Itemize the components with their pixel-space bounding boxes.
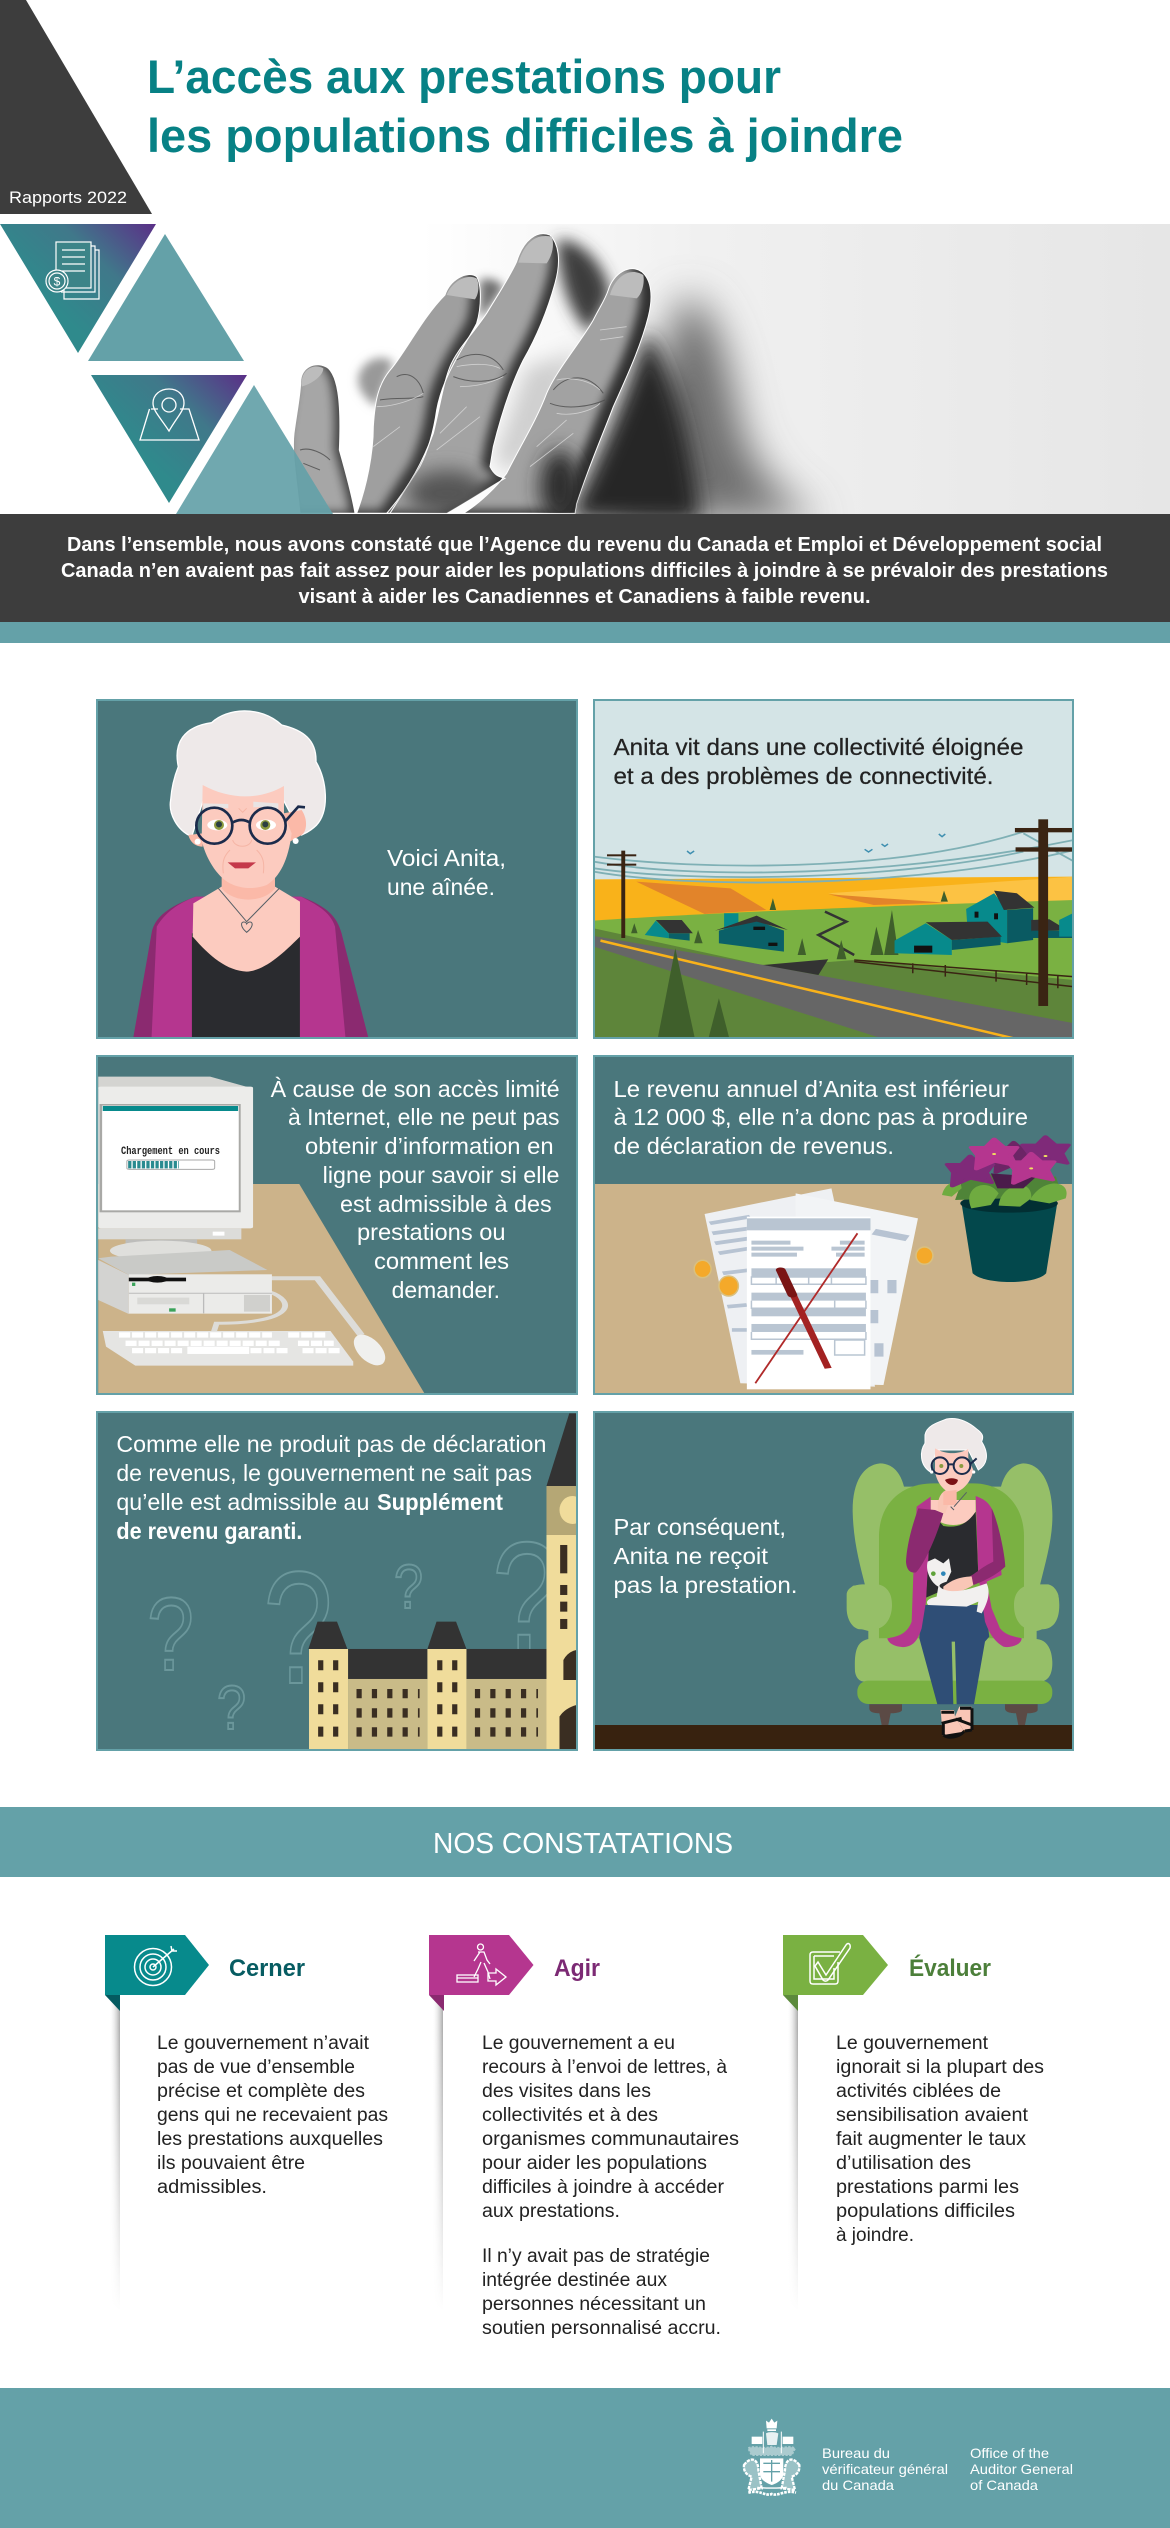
column: Agir [428, 1935, 739, 2339]
teal triangle 2 [176, 385, 333, 514]
text [271, 1076, 560, 1303]
text: et a des problèmes de connectivité. [614, 763, 994, 789]
title: L’accès aux prestations pour [147, 50, 781, 103]
text: personnes nécessitant un [482, 2294, 706, 2315]
illustration: forms, coins, pen and flower pot [594, 1137, 1074, 1395]
text: loading message: Chargement en cours [121, 1146, 220, 1158]
text: collectivités et à des [482, 2105, 658, 2126]
text: populations difficiles [836, 2201, 1015, 2222]
text: des visites dans les [482, 2081, 651, 2102]
triangle with documents icon: $ [54, 274, 61, 288]
panel: Voici Anita [96, 699, 578, 1039]
text: Supplément [377, 1489, 503, 1515]
question marks: ? [147, 1577, 194, 1693]
summary band: Canada n’en avaient pas fait assez pour aider les populations difficiles à joindre à se prévaloir des prestations [61, 560, 1108, 582]
text: pour aider les populations [482, 2153, 707, 2174]
card shadow [105, 1995, 121, 2310]
text: de revenus, le gouvernement ne sait pas [116, 1460, 532, 1486]
text: est admissible à des [340, 1191, 552, 1217]
question marks [150, 1540, 546, 1730]
report year triangle: Rapports 2022 [9, 188, 127, 207]
text: fait augmenter le taux [836, 2129, 1027, 2150]
text [116, 1431, 546, 1544]
text: organismes communautaires [482, 2129, 739, 2150]
illustration: Parliament buildings [308, 1413, 586, 1750]
text: Le gouvernement [836, 2033, 989, 2054]
text: d’utilisation des [836, 2153, 971, 2174]
question marks: ? [492, 1510, 560, 1683]
heading: Évaluer [909, 1954, 991, 1982]
flag with target icon [105, 1935, 209, 2011]
triangle with documents icon [0, 224, 156, 353]
panel: remote community [593, 699, 1074, 1040]
illustration: Anita in armchair with cat [847, 1419, 1059, 1738]
illustration: Anita portrait [133, 711, 368, 1037]
title: les populations difficiles à joindre [147, 109, 903, 162]
heading: Agir [554, 1955, 600, 1982]
footer [0, 2388, 1170, 2528]
card shadow [783, 1995, 799, 2310]
text [614, 1076, 1028, 1159]
floor [594, 1725, 1073, 1750]
summary band [0, 514, 1170, 622]
text [614, 734, 1024, 789]
text: à 12 000 $, elle n’a donc pas à produire [614, 1104, 1028, 1130]
text [387, 845, 506, 900]
teal triangle 1 [88, 234, 244, 361]
text: Voici Anita, [387, 845, 506, 871]
panel: government does not know [96, 1411, 586, 1751]
text: Comme elle ne produit pas de déclaration [116, 1431, 546, 1457]
report year triangle [0, 0, 152, 214]
text: demander. [392, 1277, 500, 1303]
summary band: Dans l’ensemble, nous avons constaté que l’Agence du revenu du Canada et Emploi et Développement social [67, 534, 1102, 556]
text: Il n’y avait pas de stratégie [482, 2246, 710, 2267]
flag with walking figure icon [429, 1935, 534, 2011]
text: qu’elle est admissible au [116, 1489, 369, 1515]
text: les prestations auxquelles [157, 2129, 383, 2150]
text: Par conséquent, [614, 1514, 786, 1540]
text: pas de vue d’ensemble [157, 2057, 355, 2078]
text [157, 2033, 388, 2198]
text: prestations ou [357, 1219, 506, 1245]
text: aux prestations. [482, 2201, 620, 2222]
triangle with map pin icon [91, 375, 247, 503]
text: à Internet, elle ne peut pas [288, 1104, 560, 1130]
card shadow [428, 1995, 444, 2310]
text: English name: Office of the [970, 2445, 1049, 2461]
hero photo: hand against wall [294, 224, 1170, 514]
text: pas la prestation. [614, 1572, 798, 1598]
panel: limited internet [96, 1055, 578, 1395]
text: gens qui ne recevaient pas [157, 2105, 388, 2126]
question marks: ? [217, 1674, 246, 1743]
column: Évaluer [783, 1935, 1044, 2310]
text: prestations parmi les [836, 2177, 1019, 2198]
panel: icon triangles [0, 224, 333, 514]
text: English name: Auditor General [970, 2461, 1073, 2477]
illustration: rural landscape [594, 819, 1074, 1040]
heading: Cerner [229, 1955, 305, 1982]
question marks: ? [394, 1553, 423, 1622]
text: sensibilisation avaient [836, 2105, 1029, 2126]
text: French name: Bureau du [822, 2445, 890, 2461]
flag with checkbox icon [783, 1935, 888, 2011]
text: à joindre. [836, 2225, 914, 2246]
text: À cause de son accès limité [271, 1076, 560, 1102]
text: intégrée destinée aux [482, 2270, 668, 2291]
text: ils pouvaient être [157, 2153, 305, 2174]
title [147, 50, 903, 162]
text: précise et complète des [157, 2081, 365, 2102]
text: comment les [374, 1248, 509, 1274]
text: admissibles. [157, 2177, 267, 2198]
text: Le revenu annuel d’Anita est inférieur [614, 1076, 1009, 1102]
text: de revenu garanti. [116, 1518, 302, 1544]
text: English name [970, 2445, 1073, 2493]
text [836, 2033, 1044, 2246]
column: Cerner [105, 1935, 388, 2310]
text: obtenir d’information en [305, 1133, 554, 1159]
section heading: Nos constatations: NOS CONSTATATIONS [433, 1828, 733, 1860]
text: English name: of Canada [970, 2477, 1038, 2493]
text: Anita vit dans une collectivité éloignée [614, 734, 1024, 760]
text: Anita ne reçoit [614, 1543, 769, 1569]
text: ligne pour savoir si elle [323, 1162, 560, 1188]
text: de déclaration de revenus. [614, 1133, 894, 1159]
text: activités ciblées de [836, 2081, 1001, 2102]
text: soutien personnalisé accru. [482, 2318, 721, 2339]
text: French name: vérificateur général [822, 2461, 948, 2477]
text: ignorait si la plupart des [836, 2057, 1044, 2078]
text: French name [822, 2445, 948, 2493]
text [614, 1514, 798, 1598]
text [482, 2033, 739, 2339]
illustration: old computer on desk [98, 1077, 425, 1394]
text: Le gouvernement a eu [482, 2033, 675, 2054]
text: une aînée. [387, 874, 495, 900]
text: difficiles à joindre à accéder [482, 2177, 725, 2198]
icon: coat of arms [744, 2419, 799, 2495]
question marks: ? [263, 1538, 333, 1717]
text: French name: du Canada [822, 2477, 894, 2493]
text: Le gouvernement n’avait [157, 2033, 370, 2054]
summary band: visant à aider les Canadiennes et Canadiens à faible revenu. [298, 586, 870, 608]
section heading: Nos constatations [0, 1807, 1170, 1877]
panel: income [593, 1055, 1074, 1395]
text: recours à l’envoi de lettres, à [482, 2057, 727, 2078]
panel: no benefit [593, 1411, 1074, 1751]
